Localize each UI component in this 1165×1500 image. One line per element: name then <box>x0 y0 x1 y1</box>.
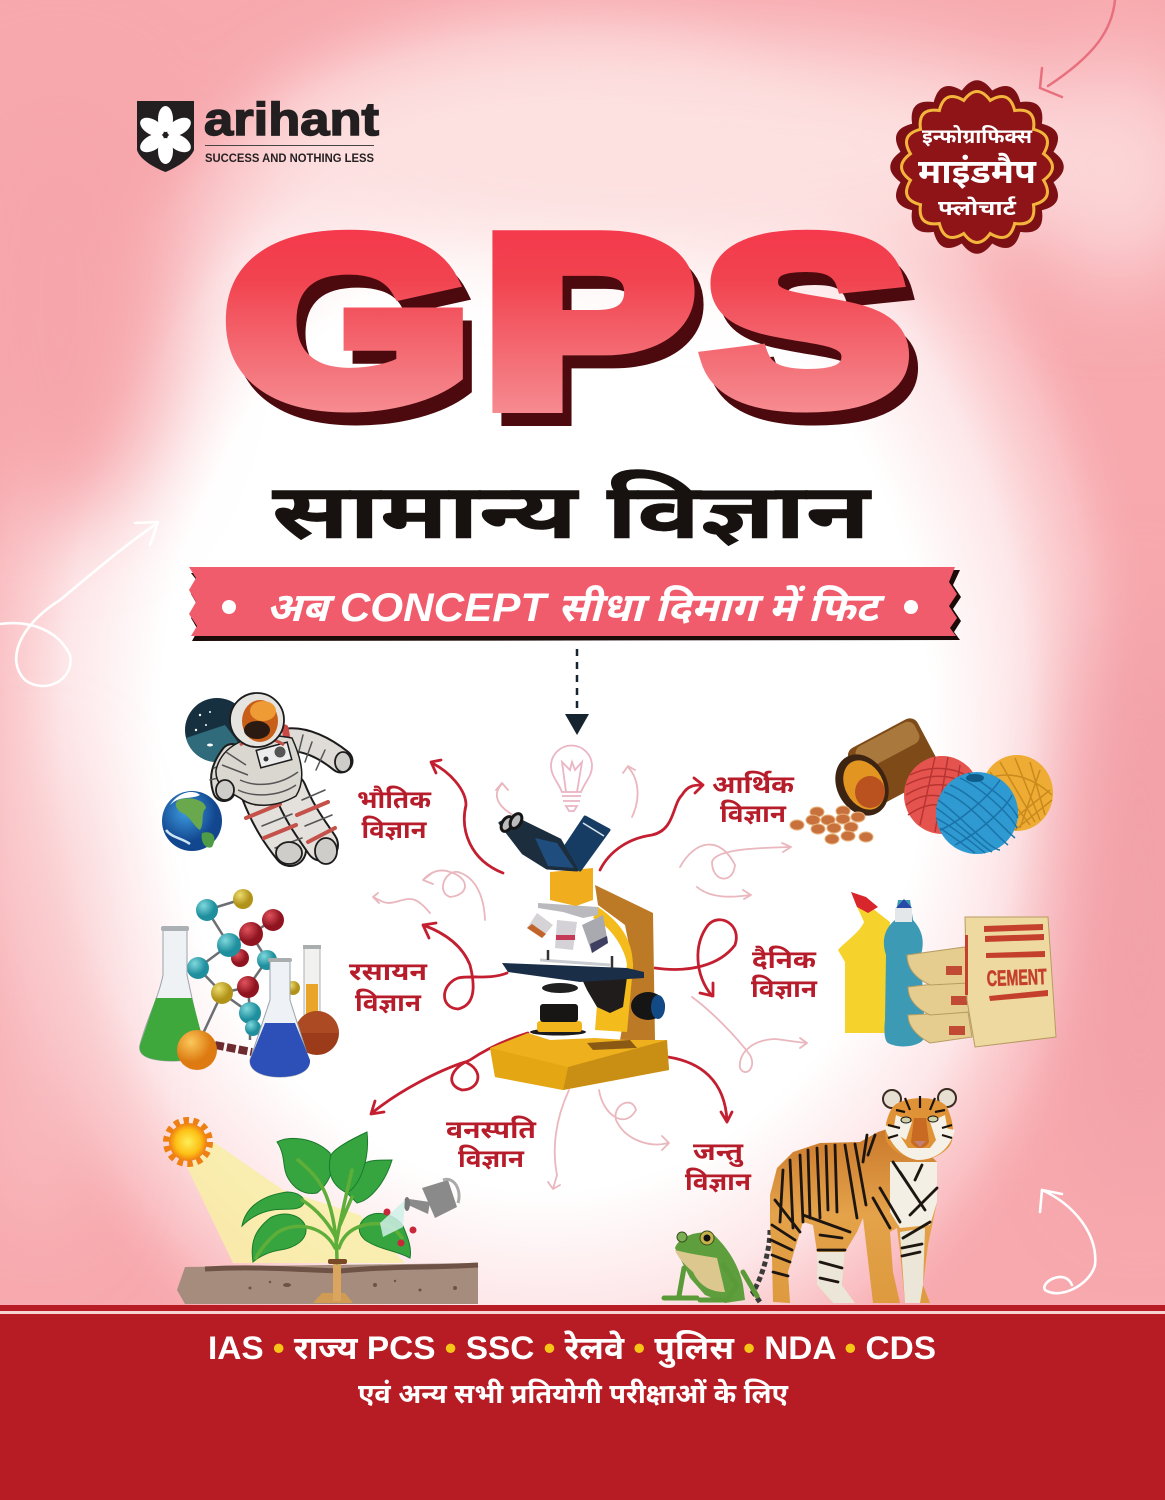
title extrusion: S <box>713 204 918 463</box>
astronaut limbs <box>210 728 341 850</box>
label: botany: विज्ञान <box>458 1144 525 1173</box>
label: physics: भौतिक <box>357 785 432 814</box>
arrow: chemistry <box>423 923 507 1009</box>
tiger body <box>770 1125 937 1303</box>
illustration: plant and soil <box>168 1122 478 1304</box>
illustration: chemistry set <box>140 889 339 1077</box>
arrow: botany <box>371 1033 528 1114</box>
arrow: daily science <box>655 920 736 996</box>
frog body <box>675 1232 745 1303</box>
arrow: physics <box>431 760 503 873</box>
logo divider <box>205 145 374 146</box>
plant root <box>333 1263 341 1301</box>
microscope stage <box>502 950 644 1013</box>
yellow bottle <box>838 892 890 1033</box>
yellow yarn <box>981 755 1053 831</box>
microscope yellow arm <box>593 907 633 1032</box>
cement stack <box>907 947 972 1043</box>
title GPS <box>226 188 918 467</box>
red yarn <box>904 756 980 834</box>
frog legs <box>664 1265 757 1300</box>
blue yarn <box>936 772 1018 854</box>
title face: S <box>704 191 909 450</box>
logo <box>137 93 379 172</box>
ribbon body <box>189 567 957 636</box>
label: botany: वनस्पति <box>446 1115 537 1144</box>
label: chemistry <box>349 958 428 1017</box>
microscope knob <box>631 992 665 1020</box>
space disc <box>185 698 249 762</box>
faint arrows <box>373 766 807 1189</box>
label: daily science: दैनिक <box>752 945 817 974</box>
orange ball <box>177 1030 217 1070</box>
title face <box>226 188 909 454</box>
illustration: tiger <box>770 1089 956 1303</box>
badge text: फ्लोचार्ट <box>938 196 1017 220</box>
plant leaves <box>242 1132 411 1262</box>
ribbon dot left <box>222 600 236 614</box>
label: physics <box>357 785 432 844</box>
illustration: frog <box>664 1230 770 1303</box>
exams line: IAS • राज्य PCS • SSC • रेलवे • पुलिस • NDA • CDS <box>208 1330 936 1368</box>
label: daily science: विज्ञान <box>751 974 818 1003</box>
title face: G <box>226 191 470 451</box>
decorative arrow: right curl <box>1040 1190 1095 1293</box>
tagline: SUCCESS AND NOTHING LESS <box>205 151 374 165</box>
ribbon <box>189 567 961 641</box>
blue bottle <box>884 899 925 1046</box>
label: economics: आर्थिक <box>712 770 795 799</box>
astronaut torso <box>216 736 302 805</box>
microscope nosepiece <box>538 903 598 918</box>
label: zoology <box>685 1138 752 1196</box>
microscope back arm <box>595 885 655 1040</box>
badge text: इन्फोग्राफिक्स <box>922 124 1033 148</box>
dashed arrow <box>565 649 589 735</box>
watering can <box>404 1179 459 1218</box>
astronaut chest pack <box>240 739 292 768</box>
title face: P <box>484 188 693 454</box>
tiger head <box>883 1089 956 1160</box>
frog tail of tiger <box>753 1230 770 1302</box>
sun ray <box>187 1143 405 1263</box>
label: physics: विज्ञान <box>362 815 427 844</box>
decorative arrow: left curl <box>0 522 158 686</box>
frog belly <box>675 1250 725 1292</box>
bottom band <box>0 1305 1165 1500</box>
label: chemistry: विज्ञान <box>355 988 422 1017</box>
band fill <box>0 1314 1165 1500</box>
decorative arrow: top right <box>1040 0 1115 97</box>
subtitle: सामान्य विज्ञान <box>272 470 872 555</box>
plant stems <box>256 1160 402 1263</box>
tiger pale legs <box>817 1228 925 1303</box>
cement stack labels <box>946 966 967 1035</box>
label: economics <box>712 770 795 828</box>
band highlight <box>0 1311 1165 1314</box>
illustration: earth <box>162 791 222 851</box>
ribbon text: अब CONCEPT सीधा दिमाग में फिट <box>266 585 886 630</box>
tiger chest <box>890 1162 937 1228</box>
tiger ears <box>883 1089 956 1108</box>
illustration: bottles and cement <box>838 892 1056 1047</box>
tiger stripes <box>771 1135 937 1282</box>
microscope base <box>490 1033 669 1090</box>
label: daily science <box>751 945 818 1003</box>
icon: light bulb <box>551 746 592 811</box>
logo flower <box>137 106 194 164</box>
microscope eyepieces <box>499 812 609 870</box>
label: chemistry: रसायन <box>349 958 428 986</box>
microscope condenser <box>530 1004 586 1036</box>
badge <box>890 80 1064 254</box>
illustration: astronaut <box>185 693 351 864</box>
astronaut helmet <box>230 693 284 747</box>
ribbon dot right <box>904 600 918 614</box>
berries <box>384 1208 416 1246</box>
label: botany <box>446 1115 537 1173</box>
band top edge <box>0 1305 1165 1311</box>
label: economics: विज्ञान <box>720 799 787 828</box>
illustration: yarn balls <box>904 755 1053 854</box>
sun <box>168 1122 208 1162</box>
astronaut boots and gloves <box>216 752 351 864</box>
molecule <box>187 889 300 1052</box>
microscope <box>490 812 669 1090</box>
title extrusion: P <box>493 201 702 467</box>
microscope objectives <box>527 913 608 953</box>
logo shield <box>137 101 194 172</box>
illustration: pill jar <box>790 715 944 844</box>
badge text: माइंडमैप <box>918 152 1037 191</box>
cement bag <box>965 917 1056 1047</box>
astronaut torso folds <box>222 752 298 795</box>
frog eyes <box>677 1231 714 1245</box>
logo wordmark: arihant <box>204 93 379 145</box>
blue flask <box>250 958 310 1077</box>
title extrusion <box>234 201 918 467</box>
arrow: economics <box>600 778 703 870</box>
label: zoology: विज्ञान <box>685 1167 752 1196</box>
pills <box>790 806 873 844</box>
cement word: CEMENT <box>986 964 1048 991</box>
soil <box>177 1263 478 1304</box>
arrow: zoology <box>668 1057 732 1122</box>
microscope head <box>550 868 593 906</box>
title extrusion: G <box>234 204 479 464</box>
plant collar <box>328 1259 347 1264</box>
ribbon shadow <box>191 570 961 641</box>
audience line: एवं अन्य सभी प्रतियोगी परीक्षाओं के लिए <box>358 1378 789 1409</box>
badge rosette <box>890 80 1064 254</box>
round flask <box>295 945 339 1055</box>
badge text <box>918 124 1037 220</box>
water spray <box>380 1200 405 1237</box>
jar body <box>825 715 944 825</box>
label: zoology: जन्तु <box>693 1138 744 1167</box>
green flask <box>140 926 203 1061</box>
